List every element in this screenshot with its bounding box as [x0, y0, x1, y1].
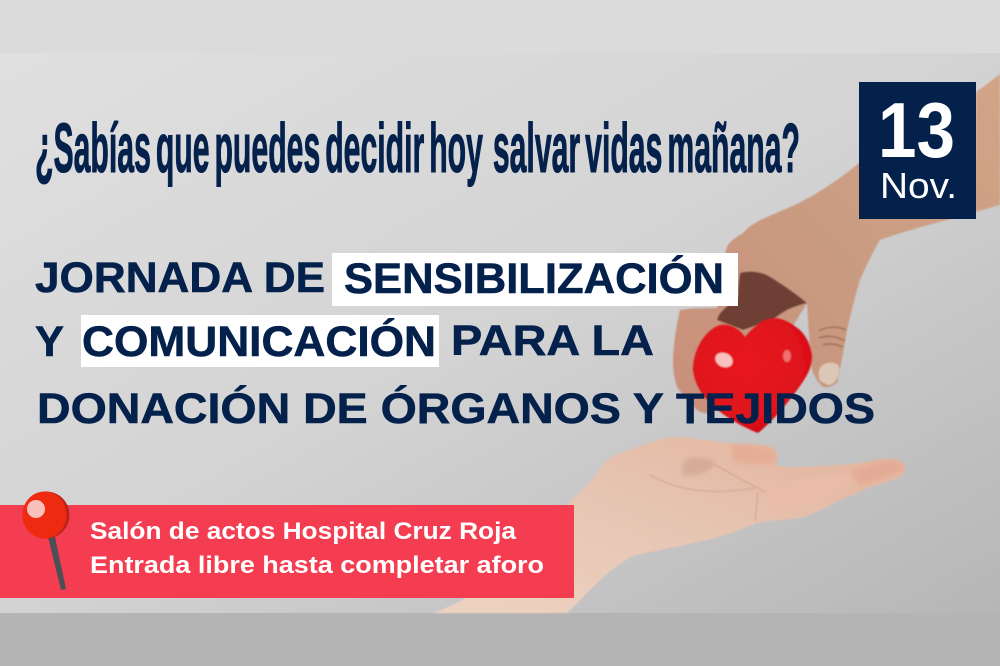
date day number: 13 — [878, 86, 955, 174]
photo: lower open hand — [434, 437, 905, 613]
upper hand: shadow gap — [717, 272, 807, 330]
heading line 3: DONACIÓN DE ÓRGANOS Y TEJIDOS — [37, 384, 875, 433]
heading line 2 end: PARA LA — [451, 317, 654, 365]
date month: Nov. — [880, 165, 957, 206]
location banner — [0, 505, 574, 598]
photo: red heart — [693, 318, 812, 433]
heading highlighted word 2: COMUNICACIÓN — [82, 317, 436, 366]
icon: map pin — [22, 492, 70, 590]
lower hand: thumb tip — [732, 444, 776, 465]
upper hand: thumbnail — [819, 363, 839, 385]
bottom band — [0, 613, 1000, 666]
photo: upper hand holding heart — [673, 74, 1000, 413]
highlight box: sensibilización — [332, 253, 738, 306]
highlight box: comunicación — [81, 315, 439, 367]
top band — [0, 0, 1000, 53]
date box — [859, 82, 976, 219]
banner line 1: Salón de actos Hospital Cruz Roja — [90, 518, 517, 545]
heading line 1: JORNADA DE — [35, 254, 325, 302]
banner line 2: Entrada libre hasta completar aforo — [90, 552, 544, 579]
heading highlighted word 1: SENSIBILIZACIÓN — [344, 254, 724, 303]
heading line 2 start: Y — [35, 318, 64, 366]
